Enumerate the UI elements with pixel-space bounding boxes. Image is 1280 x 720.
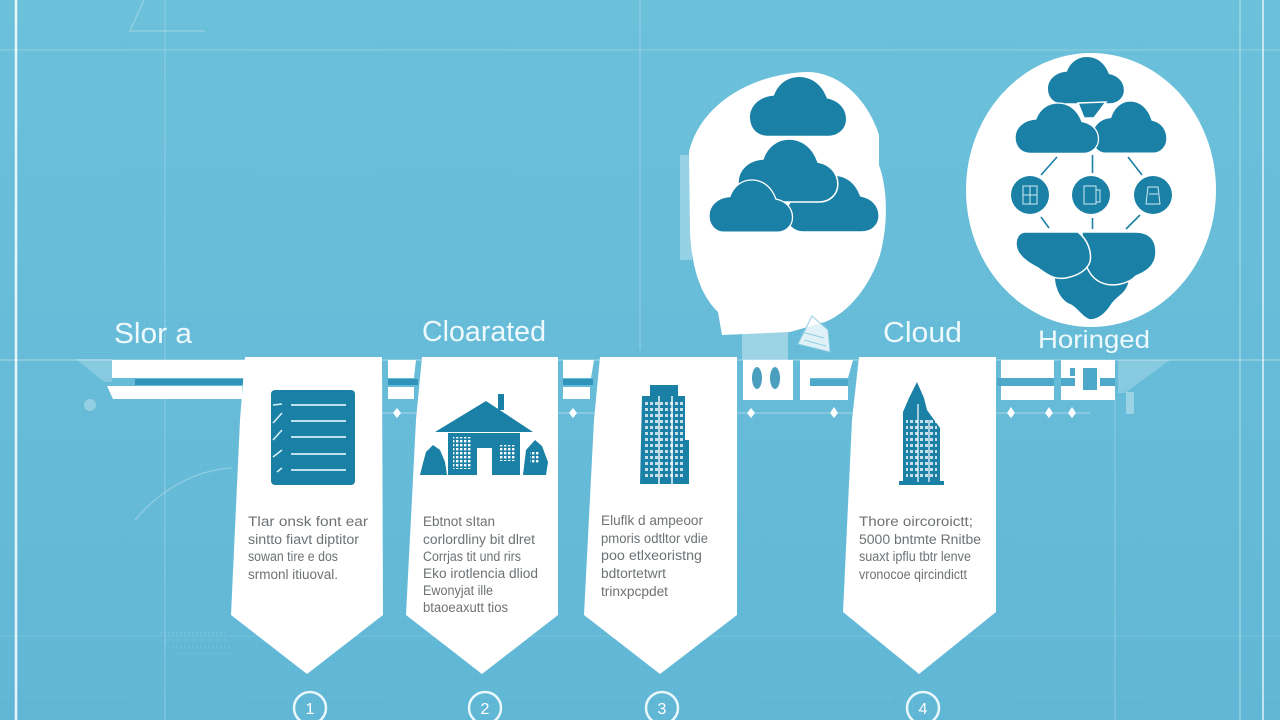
text block: vronocoe qircindictt (859, 567, 967, 582)
heading: Slora: Slor a (114, 318, 193, 350)
text block: poo etlxeoristng (601, 548, 702, 563)
translucent column behind left bubble (680, 155, 692, 260)
text block: sowan tire e dos (248, 549, 338, 564)
heading: Horinged: Horinged (1038, 326, 1150, 354)
striped fragment (798, 316, 830, 352)
panel: left cloud bubble (689, 72, 886, 352)
connector lines (1041, 155, 1142, 229)
step number 4 (907, 692, 939, 720)
text block: Eko irotlencia dliod (423, 566, 538, 581)
translucent column under left bubble (742, 330, 788, 360)
text block: bdtortetwrt (601, 566, 666, 581)
text block: Eluflk d ampeoor (601, 513, 703, 528)
text block: Corrjas tit und rirs (423, 549, 521, 564)
text block: Ewonyjat ille (423, 583, 493, 598)
panel: card 4 (843, 357, 996, 674)
text block: btaoeaxutt tios (423, 600, 508, 615)
step number 2: 2 (481, 701, 490, 718)
small marker right (1126, 392, 1134, 414)
text block (601, 513, 708, 599)
step number 2 (469, 692, 501, 720)
step number 3 (646, 692, 678, 720)
text block: Tlar onsk font ear (248, 514, 369, 529)
small marker left (84, 399, 96, 411)
heading: Cloarated: Cloarated (422, 316, 546, 348)
icon: house with trees (420, 394, 548, 475)
text block: 5000 bntmte Rnitbe (859, 532, 981, 547)
step number 4: 4 (919, 701, 928, 718)
icon: top cloud (1048, 57, 1124, 103)
text block: trinxpcpdet (601, 584, 668, 599)
text block (423, 514, 538, 615)
icon: skyscraper (899, 382, 944, 485)
text block: Thore oircoroictt; (859, 514, 973, 529)
text block: corlordliny bit dlret (423, 532, 535, 547)
icon: office tower (640, 385, 689, 484)
text block: suaxt ipflu tbtr lenve (859, 549, 971, 564)
step number 3: 3 (658, 701, 667, 718)
horizontal banner strip (107, 360, 1115, 400)
icon: top cloud (750, 77, 846, 136)
icon: upper clouds (1015, 101, 1167, 153)
step number 1: 1 (306, 701, 315, 718)
text block: Ebtnot sItan (423, 514, 495, 529)
left decorative glow (76, 359, 112, 382)
icon: node circles (1011, 176, 1172, 214)
text block: srmonl itiuoval. (248, 567, 338, 582)
heading: Cloud: Cloud (883, 317, 962, 349)
text block: pmoris odtltor vdie (601, 531, 708, 546)
right decorative glow (1118, 360, 1170, 393)
panel: right network bubble (966, 53, 1216, 327)
icon: lower clouds (1016, 232, 1156, 320)
step number 1 (294, 692, 326, 720)
text block: sintto fiavt diptitor (248, 532, 360, 547)
text block (859, 514, 981, 582)
text block (248, 514, 369, 582)
panel: card 3 (584, 357, 737, 674)
timeline markers (380, 407, 1090, 418)
icon: cloud cluster (709, 139, 879, 232)
icon: document checklist (271, 390, 355, 485)
panel: card 2 (406, 357, 558, 674)
panel: card 1 (231, 357, 383, 674)
